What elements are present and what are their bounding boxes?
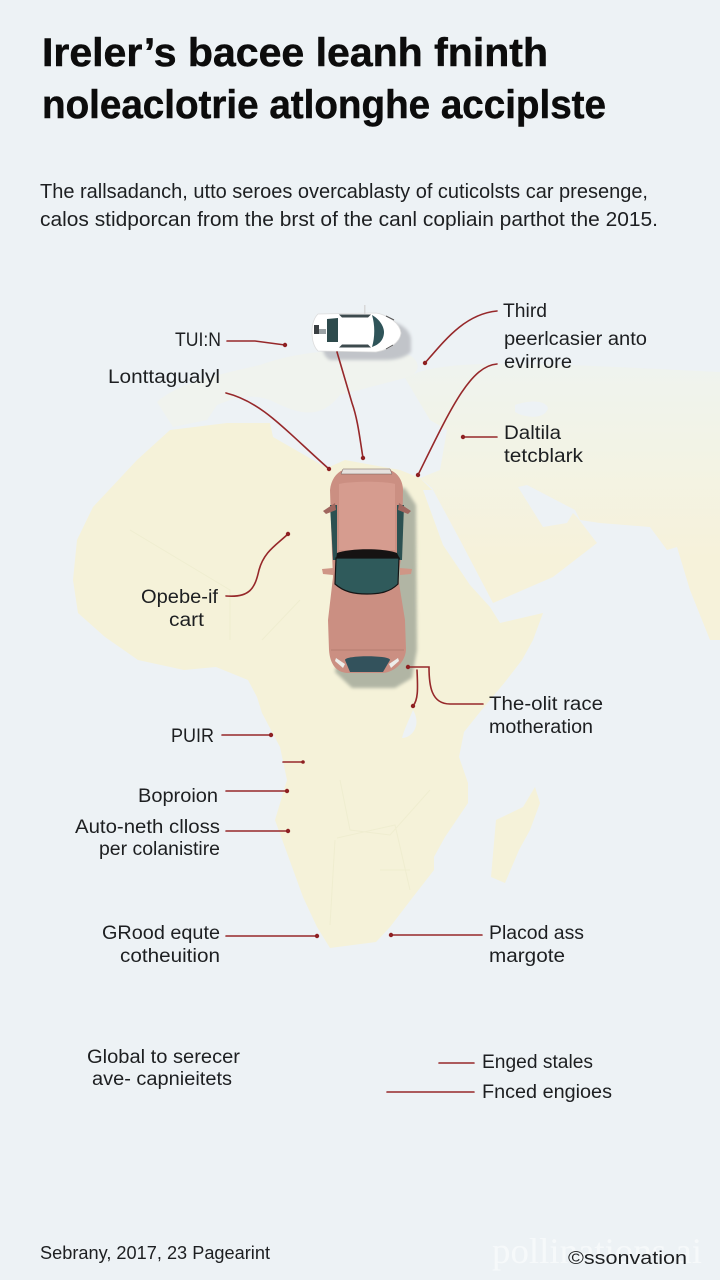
callout: Auto-neth clloss per colanistire: Auto-neth clloss: [75, 817, 220, 838]
callout: peerlcasier anto evirrore: evirrore: [504, 352, 572, 373]
callout: GRood equte cotheuition: [102, 923, 319, 967]
note: Global to serecer: Global to serecer: [87, 1047, 241, 1068]
callout: PUIR: [171, 726, 273, 747]
callout: Placod ass margote: Placod ass: [489, 923, 584, 944]
callout: The-olit race motheration: [406, 665, 603, 738]
title: noleaclotrie atlonghe acciplste: [42, 83, 606, 127]
callout: Third: Third: [503, 301, 547, 322]
title: [42, 31, 606, 127]
callout: Third: [423, 301, 547, 365]
icon: large pink car: [322, 469, 417, 688]
callout: Boproion: [138, 786, 289, 807]
callout: Daltila tetcblark: tetcblark: [504, 446, 584, 467]
connector: small car to large car: [337, 352, 365, 460]
callout: Daltila tetcblark: Daltila: [504, 423, 561, 444]
callout: peerlcasier anto evirrore: peerlcasier anto: [504, 329, 647, 350]
callout: TUI:N: TUI:N: [175, 330, 221, 351]
footer: credit: ©ssonvation: [568, 1248, 687, 1268]
callout: The-olit race motheration: motheration: [489, 717, 593, 738]
icon: small white car: [312, 305, 411, 360]
callout: The-olit race motheration: The-olit race: [489, 694, 603, 715]
callout: peerlcasier anto evirrore: [416, 329, 647, 477]
legend: Enged stales: Enged stales: [482, 1052, 593, 1073]
title: Ireler’s bacee leanh fninth: [42, 31, 548, 75]
note: Global to serecer: ave- capnieitets: [92, 1069, 232, 1090]
callout: Auto-neth clloss per colanistire: [75, 817, 290, 860]
callout: PUIR: PUIR: [171, 726, 214, 747]
legend: Fnced engioes: Fnced engioes: [482, 1082, 612, 1103]
note: Global to serecer: [87, 1047, 241, 1090]
callout: Lonttagualyl: Lonttagualyl: [108, 367, 220, 388]
callout: Boproion: Boproion: [138, 786, 218, 807]
callout: TUI:N: [175, 330, 287, 351]
callout: Daltila tetcblark: [461, 423, 584, 467]
callout: Placod ass margote: [389, 923, 584, 967]
callout: Opebe-if cart: [141, 532, 290, 631]
watermark: pollinations.ai: [492, 1231, 702, 1271]
subtitle text block: The rallsadanch, utto seroes overcablasty of cuticolsts car presenge,: [40, 180, 648, 203]
short pointer: [283, 760, 305, 764]
callout: Opebe-if cart: cart: [169, 610, 205, 631]
callout: Lonttagualyl: [108, 367, 331, 471]
subtitle text block: calos stidporcan from the brst of the canl copliain parthot the 2015.: [40, 208, 658, 231]
map: Africa, Europe and Asia: [73, 350, 720, 948]
callout: Placod ass margote: margote: [489, 946, 565, 967]
callout: GRood equte cotheuition: cotheuition: [120, 946, 220, 967]
callout: GRood equte cotheuition: GRood equte: [102, 923, 220, 944]
subtitle text block: [40, 180, 658, 231]
footer: date and source: Sebrany, 2017, 23 Pagearint: [40, 1243, 270, 1263]
callout: Opebe-if cart: Opebe-if: [141, 587, 219, 608]
callout: Auto-neth clloss per colanistire: per colanistire: [99, 839, 220, 860]
